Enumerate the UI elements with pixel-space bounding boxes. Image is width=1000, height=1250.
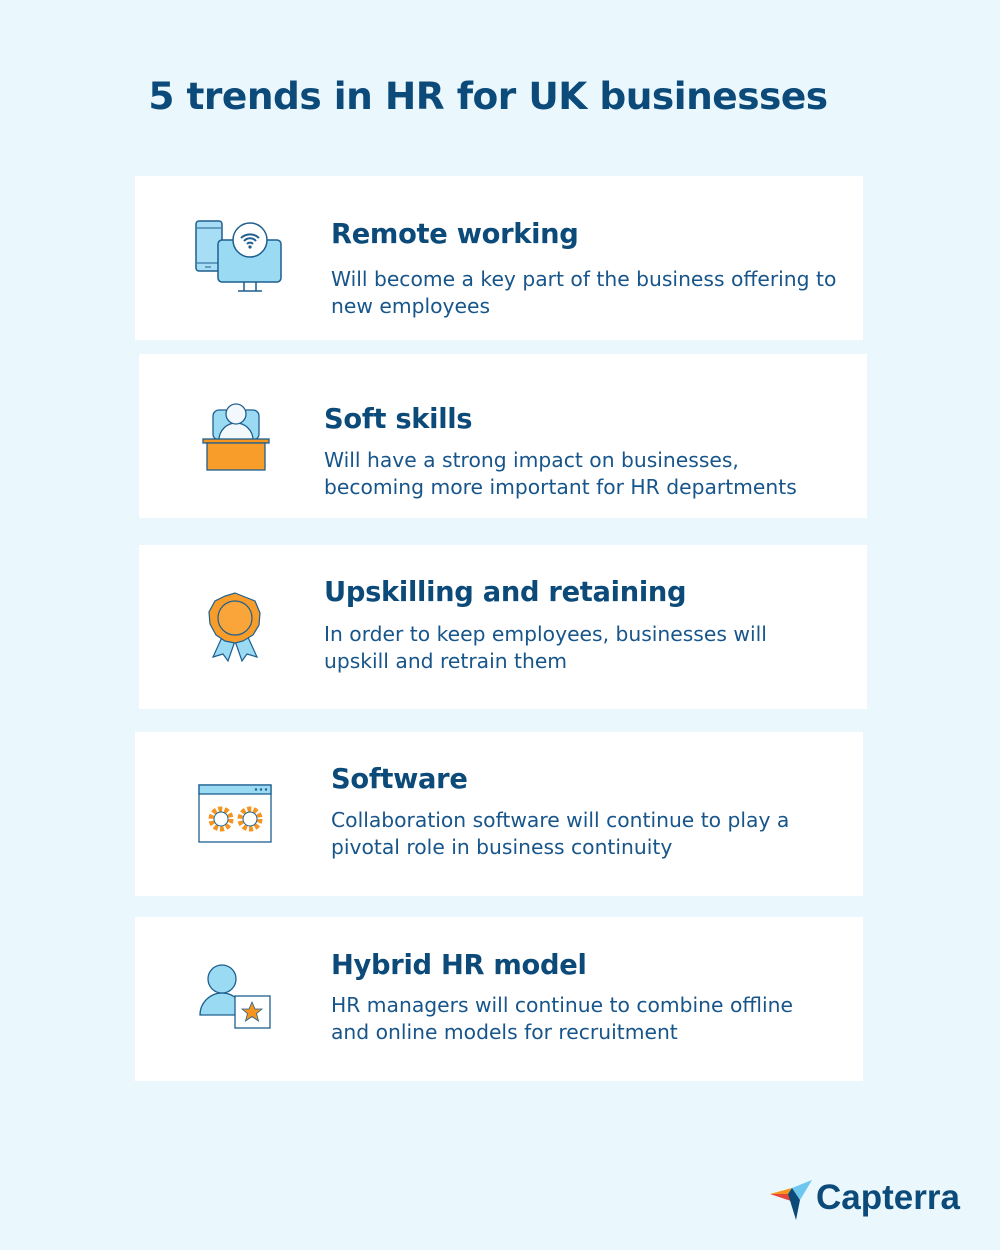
heading: Software [331,764,468,795]
text [331,808,789,859]
text [324,448,797,499]
icon: person with star [199,964,271,1029]
icon: browser with gears [198,784,272,843]
heading: Upskilling and retaining [324,577,686,608]
panel: hybrid HR [135,917,863,1081]
text: In order to keep employees, businesses will [324,622,767,646]
icon: award badge [208,592,261,662]
logo: Capterra: Capterra [816,1178,960,1217]
text: HR managers will continue to combine offline [331,993,793,1017]
heading: Hybrid HR model [331,950,587,981]
icon: person at desk [202,403,270,471]
text: new employees [331,294,490,318]
text: and online models for recruitment [331,1020,678,1044]
text [324,622,767,673]
text: Will have a strong impact on businesses, [324,448,739,472]
panel: software [135,732,863,896]
text: pivotal role in business continuity [331,835,672,859]
text: Collaboration software will continue to play a [331,808,789,832]
panel: soft skills [139,354,867,518]
text [331,267,836,318]
heading: Remote working [331,219,579,250]
heading: Soft skills [324,404,472,435]
icon: devices with wifi [195,220,282,292]
panel: upskilling [139,545,867,709]
panel: remote working [135,176,863,340]
title: 5 trends in HR for UK businesses [148,74,828,118]
text: Will become a key part of the business offering to [331,267,836,291]
text: upskill and retrain them [324,649,567,673]
text: becoming more important for HR departments [324,475,797,499]
text [331,993,793,1044]
